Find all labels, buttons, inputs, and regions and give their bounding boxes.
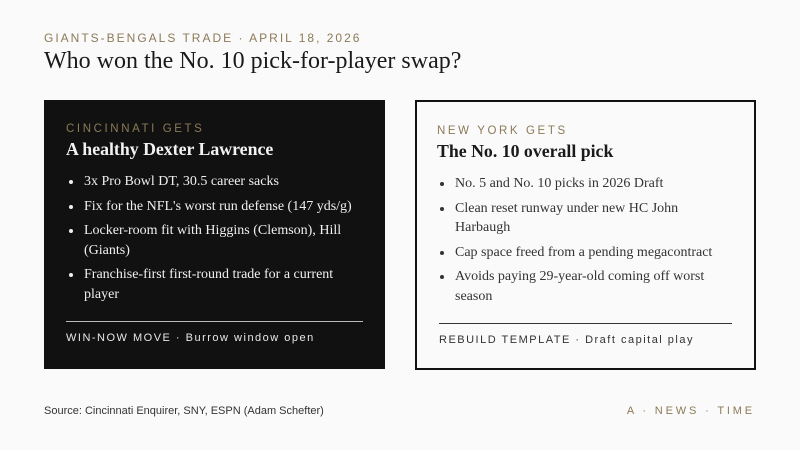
bullets: new york: Clean reset runway under new HC John Harbaugh <box>455 200 678 235</box>
bullets: cincinnati <box>69 174 352 302</box>
bullets: cincinnati: 3x Pro Bowl DT, 30.5 career sacks <box>84 174 279 189</box>
source: Source: Cincinnati Enquirer, SNY, ESPN (Adam Schefter) <box>44 405 324 417</box>
bullets: cincinnati: Fix for the NFL's worst run defense (147 yds/g) <box>84 198 352 214</box>
footer: win-now move: WIN-NOW MOVE · Burrow window open <box>66 332 315 344</box>
title: Who won the No. 10 pick-for-player swap? <box>44 48 461 74</box>
footer: win-now move <box>66 321 363 344</box>
footer: rebuild template <box>439 323 732 346</box>
footer: rebuild template: REBUILD TEMPLATE · Draft capital play <box>439 334 694 346</box>
heading: dexter lawrence: A healthy Dexter Lawrence <box>66 139 273 159</box>
kicker: GIANTS-BENGALS TRADE · APRIL 18, 2026 <box>44 31 361 45</box>
heading: no. 10 pick: The No. 10 overall pick <box>437 141 613 161</box>
label: cincinnati gets: CINCINNATI GETS <box>66 123 204 135</box>
label: new york gets: NEW YORK GETS <box>437 125 568 137</box>
panel: new york <box>415 100 756 370</box>
bullets: new york: Cap space freed from a pending megacontract <box>455 244 712 260</box>
bullets: cincinnati: Franchise-first first-round trade for a current player <box>84 267 333 302</box>
bullets: new york <box>440 176 712 304</box>
bullets: cincinnati: Locker-room fit with Higgins (Clemson), Hill (Giants) <box>84 223 341 258</box>
brand: A · NEWS · TIME <box>627 405 755 417</box>
bullets: new york: No. 5 and No. 10 picks in 2026 Draft <box>455 176 663 191</box>
panel: cincinnati <box>44 100 385 369</box>
bullets: new york: Avoids paying 29-year-old coming off worst season <box>455 269 704 304</box>
